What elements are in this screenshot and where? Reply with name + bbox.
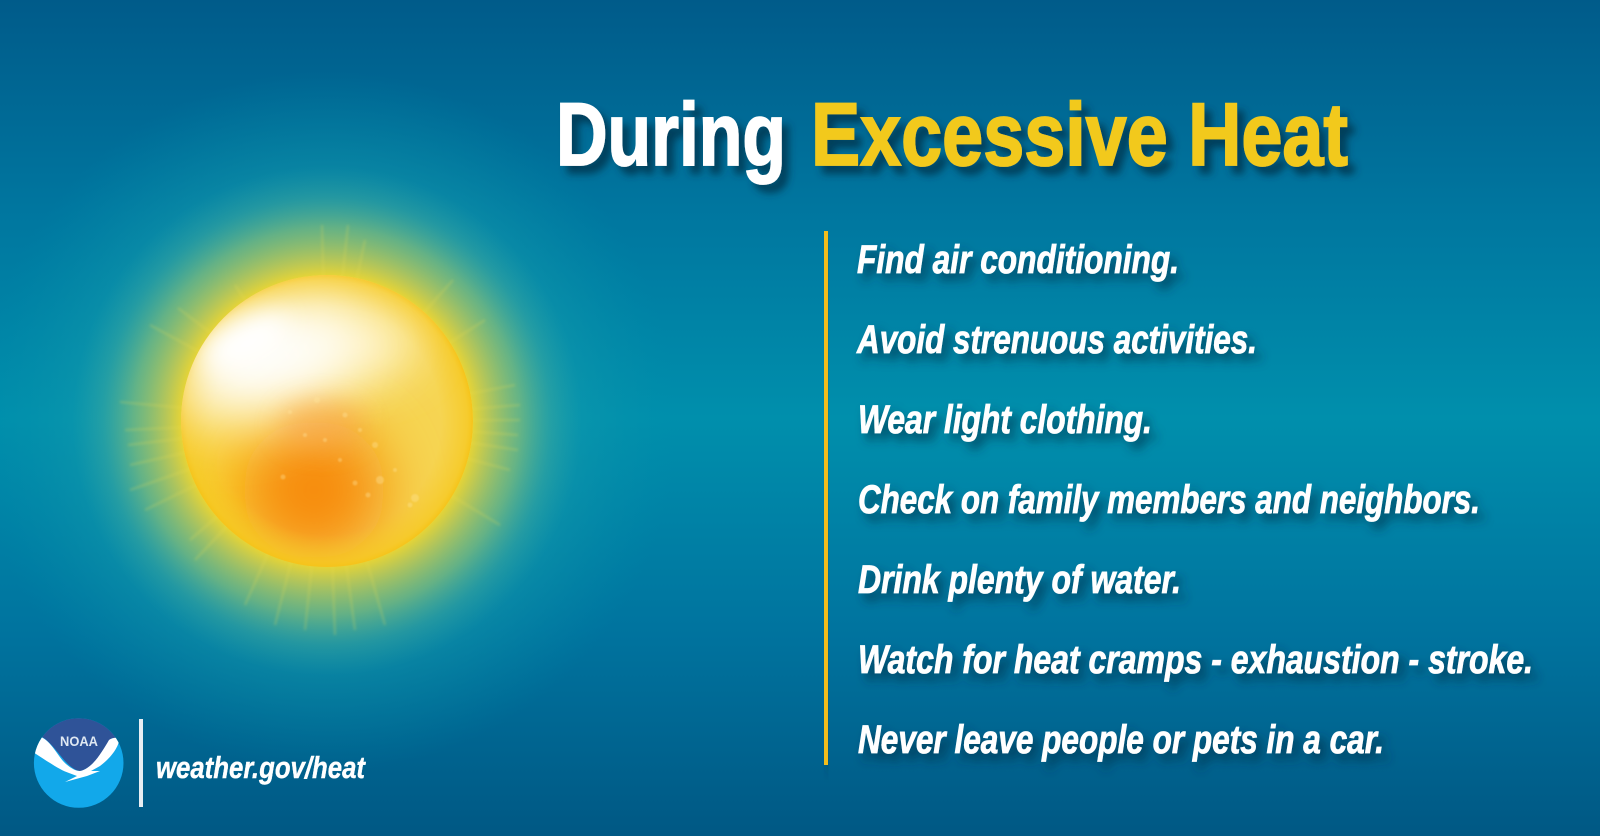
sun glow [72,166,582,676]
sun sparkles [280,397,419,508]
sun disc [163,275,473,567]
logo wordmark: NOAA [60,733,98,749]
logo gull [33,737,119,782]
logo lower disc [34,718,124,808]
title word: During: During [556,84,786,184]
tip 1: Find air conditioning. [857,238,1179,282]
sun rays [120,225,520,635]
sun halo [0,71,677,771]
tip 2: Avoid strenuous activities. [856,318,1257,362]
NOAA logo [33,715,125,808]
list of safety tips [856,238,1533,762]
tip 3: Wear light clothing. [858,398,1152,442]
website url: weather.gov/heat [156,750,366,785]
tip 7: Never leave people or pets in a car. [858,718,1384,762]
sun [72,112,583,734]
logo upper field [42,718,116,771]
title words: Excessive Heat: Excessive Heat [811,84,1348,184]
vertical accent bar [824,231,828,765]
footer divider [139,719,143,807]
tip 5: Drink plenty of water. [858,558,1181,602]
title [556,84,1348,184]
